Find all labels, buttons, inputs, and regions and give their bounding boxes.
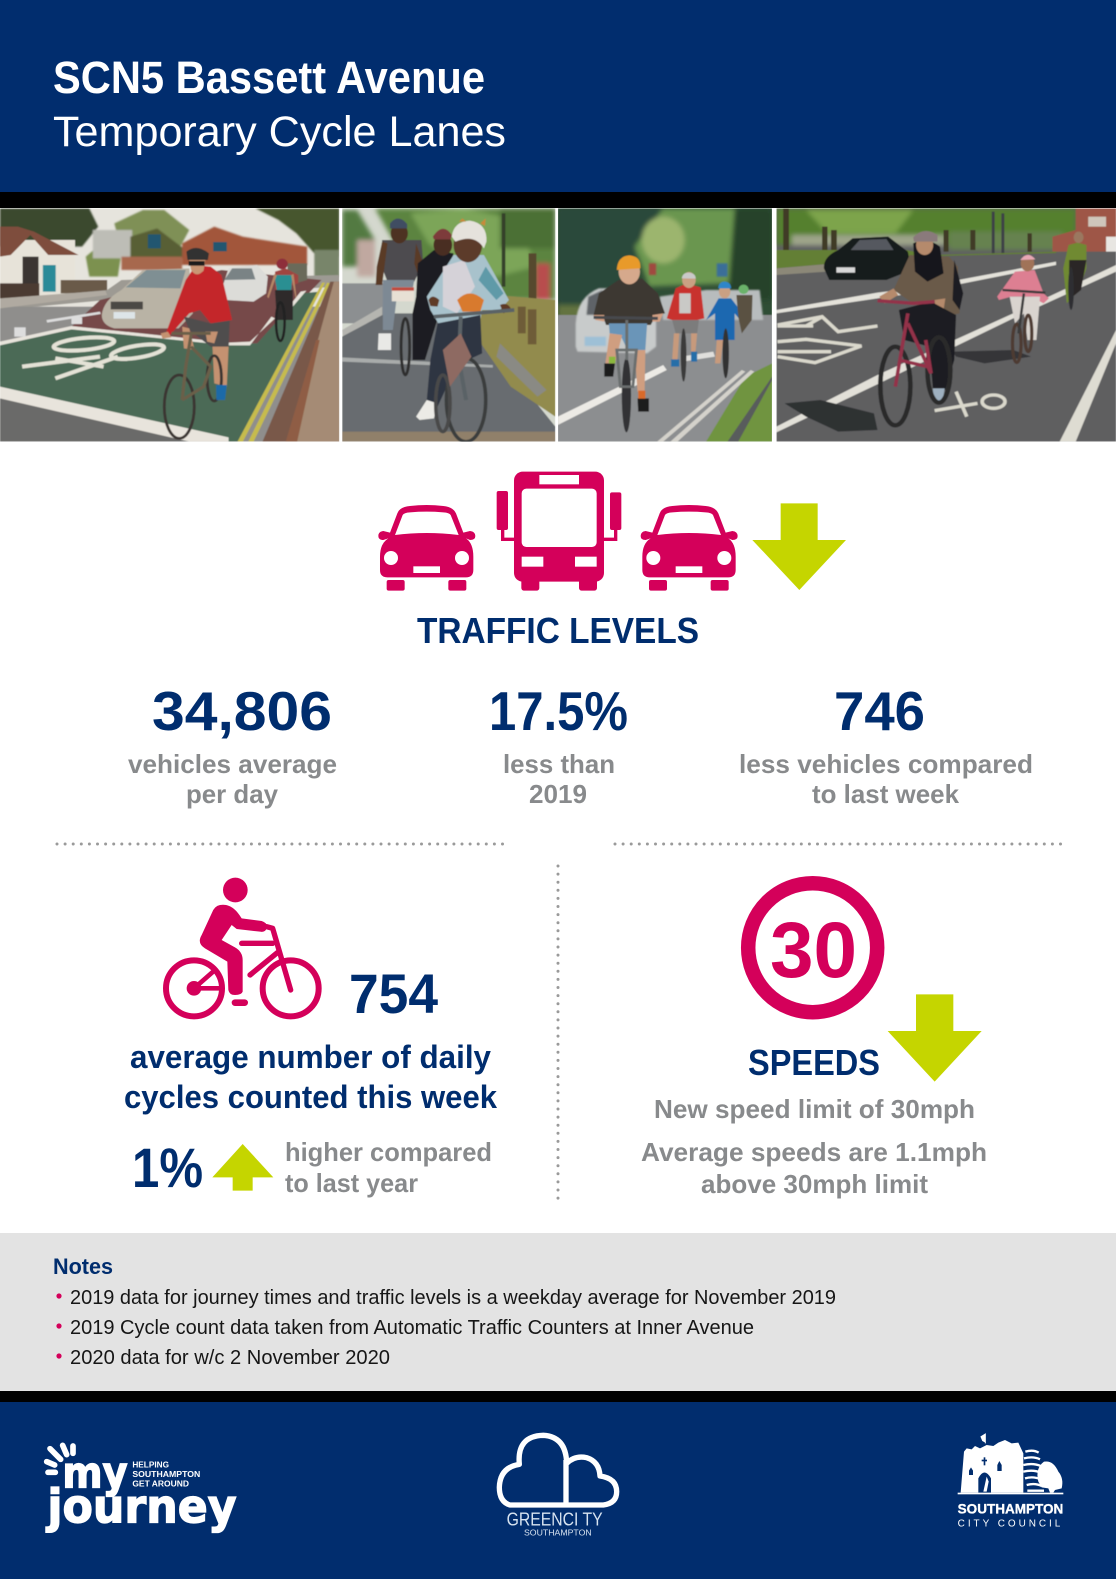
subtitle: Temporary Cycle Lanes (53, 108, 506, 156)
photo: woman in hijab and child cycling in lane (776, 208, 1116, 442)
icon: 30 speed sign: 30 (770, 905, 857, 994)
stat: less than 2019: 17.5% (489, 680, 628, 742)
stat: vehicles per day (128, 680, 337, 809)
stat: less than 2019 (489, 680, 628, 809)
stat: vehicles per day: vehicles average (128, 749, 337, 779)
icon: 30 speed sign (748, 883, 877, 1012)
number: 1%: 1% (132, 1136, 203, 1199)
white gutters between photos (340, 208, 776, 442)
arrow: speeds down (888, 994, 982, 1082)
stat: less vehicles than last week: to last week (812, 779, 960, 809)
traffic icons (378, 472, 846, 591)
panel: notes (0, 1233, 1116, 1391)
text: cycle count description: average number of daily (130, 1039, 491, 1075)
logo: my journey: HELPING (132, 1460, 169, 1469)
number: 754: 754 (349, 962, 438, 1025)
icon: car right (641, 505, 738, 591)
text: higher compared: to last year (285, 1168, 418, 1198)
logo: green city: GREENCI TY (507, 1509, 603, 1530)
footer band (0, 1391, 1116, 1579)
photo: three cyclists on a shared path (342, 208, 555, 442)
stat: less than 2019: less than (503, 749, 615, 779)
stat: less vehicles than last week (739, 680, 1033, 809)
photo strip (0, 208, 1116, 442)
note 1: 2019 data for journey times and traffic levels is a weekday average for November 2019 (70, 1287, 836, 1309)
text: speed details (641, 1094, 987, 1199)
heading: notes: Notes (53, 1254, 113, 1279)
logo: my journey: GET AROUND (132, 1480, 189, 1489)
icon: car left (378, 505, 475, 591)
stat: less than 2019: 2019 (529, 779, 587, 809)
text: cycle count description (124, 1039, 497, 1115)
logo: southampton city council (958, 1434, 1063, 1529)
panel: speeds (641, 883, 987, 1199)
stat: vehicles per day: per day (186, 779, 279, 809)
logo: green city: SOUTHAMPTON (524, 1528, 592, 1538)
note 3: 2020 data for w/c 2 November 2020 (70, 1347, 390, 1369)
text: higher compared (285, 1137, 492, 1198)
arrow: traffic down (752, 503, 846, 590)
logo: my journey: SOUTHAMPTON (132, 1470, 201, 1479)
text: speed details: above 30mph limit (701, 1169, 928, 1199)
stat: less vehicles than last week: 746 (834, 680, 925, 742)
logo: my journey: journey (45, 1481, 237, 1535)
logo: southampton city council: CITY COUNCIL (958, 1518, 1063, 1529)
icon: cyclist (166, 878, 319, 1016)
panel: cycling (124, 878, 497, 1199)
heading: traffic levels: TRAFFIC LEVELS (417, 610, 699, 651)
logo: green city (499, 1435, 617, 1538)
photo: cyclist on green advance stop box (0, 208, 339, 442)
text: speed details: Average speeds are 1.1mph (641, 1137, 987, 1167)
stat: vehicles per day: 34,806 (152, 680, 332, 742)
text: cycle count description: cycles counted this week (124, 1079, 497, 1115)
photo: boy in orange helmet leading family ride (558, 208, 772, 442)
logo: my journey: my (62, 1448, 128, 1498)
note 2: 2019 Cycle count data taken from Automatic Traffic Counters at Inner Avenue (70, 1317, 754, 1339)
arrow: up (212, 1144, 273, 1191)
icon: bus (497, 472, 621, 591)
text: higher compared: higher compared (285, 1137, 492, 1167)
stat: less vehicles than last week: less vehicles compared (739, 749, 1033, 779)
logo: southampton city council: SOUTHAMPTON (958, 1500, 1063, 1516)
text: speed details: New speed limit of 30mph (654, 1094, 975, 1124)
heading: speeds: SPEEDS (748, 1042, 880, 1083)
header banner (0, 0, 1116, 208)
logo: my journey (45, 1445, 237, 1535)
title: SCN5 Bassett Avenue (53, 52, 485, 103)
